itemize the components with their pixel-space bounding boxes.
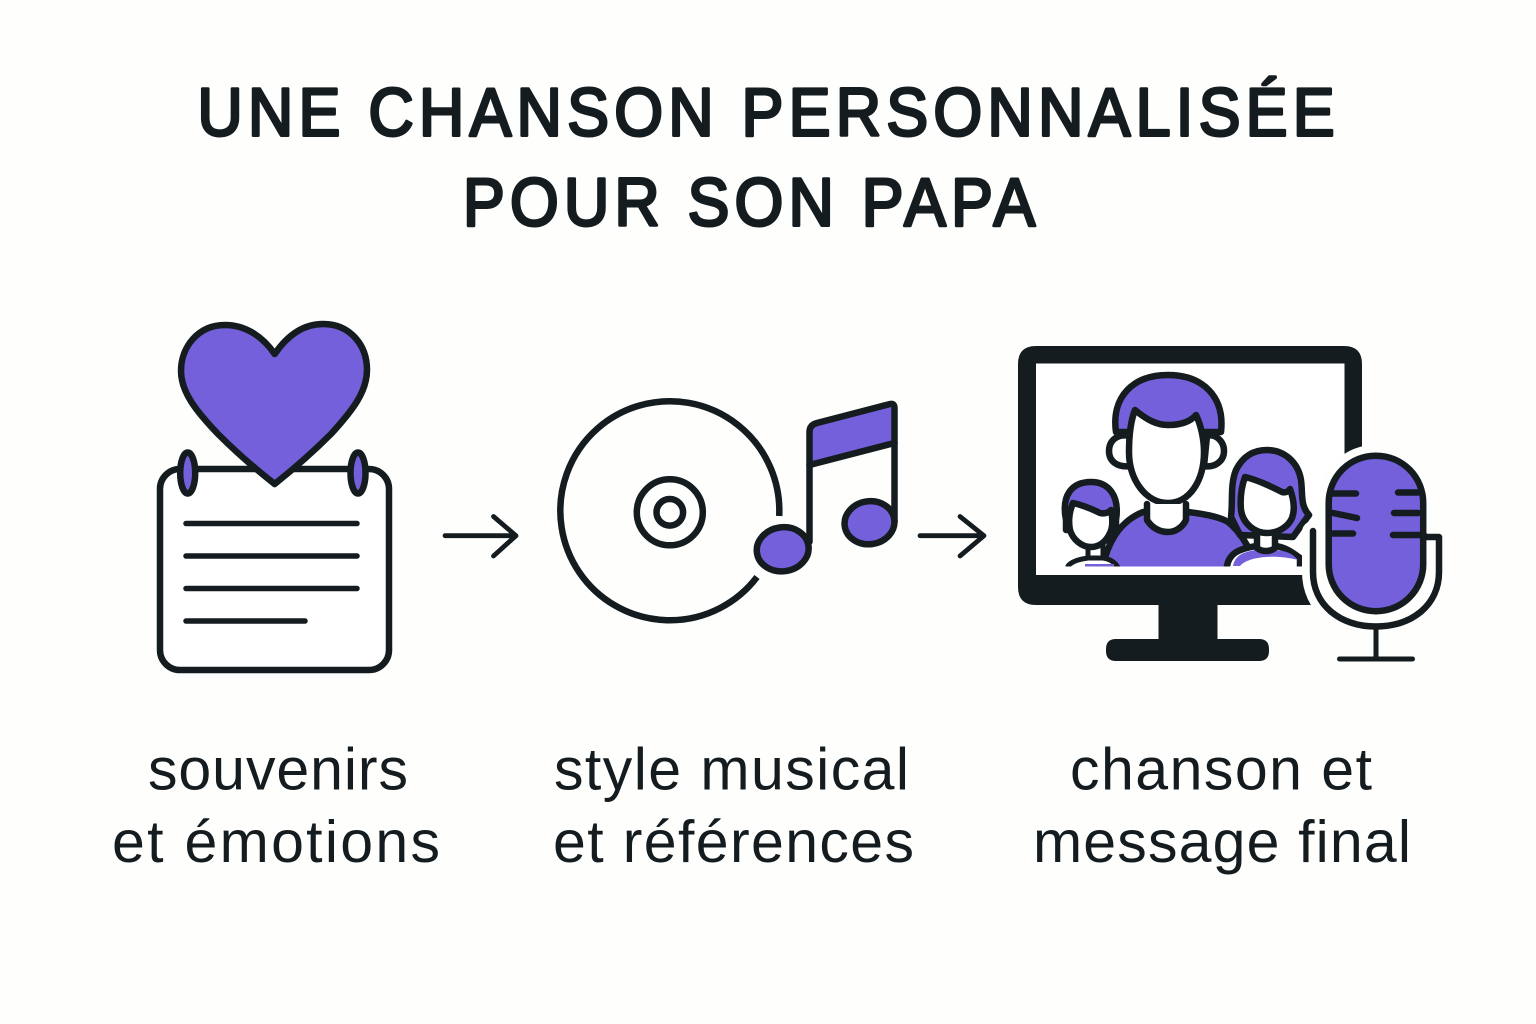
- notepad lines: [186, 524, 357, 621]
- title: [198, 74, 1335, 240]
- notepad page: [160, 469, 389, 670]
- arrow: step 2 to step 3: [920, 516, 984, 556]
- father hair: [1115, 375, 1221, 432]
- label: chanson et message final: [1033, 736, 1411, 875]
- icon: notepad with heart: [160, 324, 389, 670]
- left child neck: [1088, 545, 1103, 558]
- infographic canvas: [114, 75, 1442, 874]
- label: style musical et références: et références: [553, 809, 914, 875]
- music note left head: [754, 524, 812, 575]
- left child body colour: [1085, 564, 1114, 566]
- heart: [181, 324, 367, 484]
- title: UNE CHANSON PERSONNALISÉE: [198, 74, 1335, 150]
- father face: [1129, 410, 1204, 503]
- woman body: [1224, 543, 1302, 566]
- music note beam: [810, 404, 894, 465]
- woman hair: [1231, 450, 1309, 537]
- father left ear: [1109, 435, 1131, 466]
- label: souvenirs et émotions: [112, 736, 440, 875]
- icon: monitor with family and microphone: [1018, 346, 1439, 661]
- microphone stand: [1340, 628, 1412, 659]
- microphone cradle: [1313, 531, 1439, 626]
- label: style musical et références: style musical: [554, 736, 909, 802]
- icon: disc and music note: [560, 401, 897, 620]
- microphone capsule: [1329, 456, 1423, 611]
- label: chanson et message final: chanson et: [1070, 736, 1372, 802]
- father right ear: [1204, 435, 1224, 466]
- left child hair: [1065, 482, 1117, 530]
- father body: [1106, 508, 1250, 566]
- music note stems: [810, 443, 894, 542]
- screen: [1036, 364, 1344, 575]
- microphone white halo: [1313, 456, 1438, 627]
- arrow: step 1 to step 2: [445, 516, 516, 556]
- title: POUR SON PAPA: [463, 164, 1036, 240]
- left child face: [1069, 503, 1112, 547]
- woman face: [1241, 477, 1294, 533]
- family portrait: [1065, 375, 1309, 575]
- label: chanson et message final: message final: [1033, 809, 1411, 875]
- label: souvenirs et émotions: souvenirs: [148, 736, 408, 802]
- notepad right ring: [350, 452, 366, 494]
- disc outline: [560, 401, 779, 620]
- label: style musical et références: [553, 736, 914, 875]
- microphone slits: [1333, 492, 1424, 535]
- disc outer centre ring: [637, 479, 703, 545]
- music note right head: [842, 498, 897, 547]
- woman neck: [1257, 530, 1275, 551]
- woman body colour: [1233, 550, 1298, 566]
- left child body: [1068, 558, 1119, 570]
- father neck: [1147, 504, 1186, 532]
- disc inner centre ring: [656, 499, 683, 526]
- monitor frame: [1018, 346, 1362, 661]
- label: souvenirs et émotions: et émotions: [112, 809, 440, 875]
- notepad left ring: [180, 452, 195, 494]
